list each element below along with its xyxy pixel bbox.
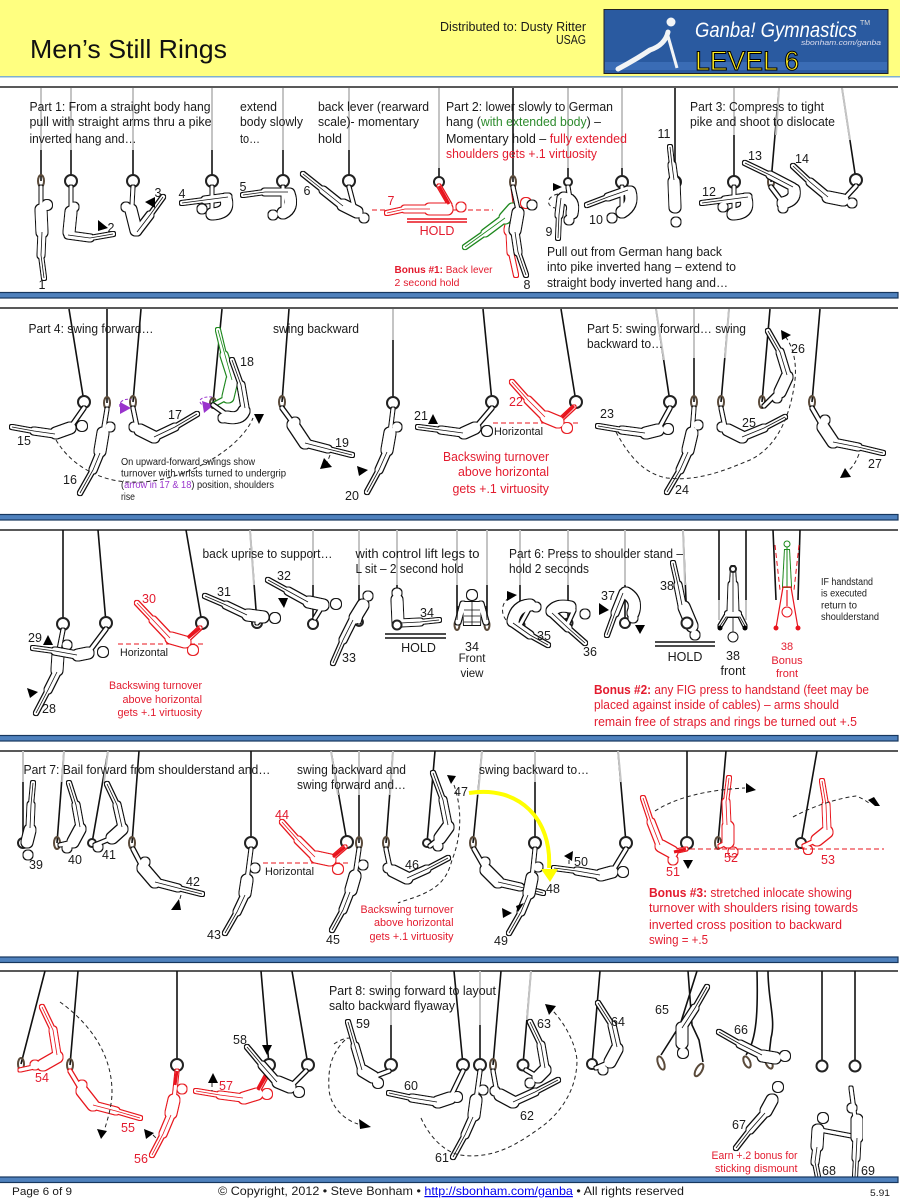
text: back lever: scale)- momentary <box>318 115 420 129</box>
figure 59: 59 <box>356 1017 370 1031</box>
callout: backswing turnover <box>109 680 202 719</box>
figure 62 <box>490 971 558 1123</box>
text: Part 1: Part 1: From a straight body hang <box>30 100 211 114</box>
figure 23: 23 <box>600 407 614 421</box>
figure 54 red <box>18 971 57 1085</box>
text: Part 6 <box>509 547 683 576</box>
figure 60 <box>389 971 469 1102</box>
distribution note: Distributed to: Dusty Ritter <box>440 20 586 34</box>
figure 10: 10 <box>589 213 603 227</box>
callout: sticking dismount bonus: Earn +.2 bonus for <box>712 1150 798 1162</box>
figure 63: 63 <box>537 1017 551 1031</box>
figure 37: 37 <box>601 589 615 603</box>
figure 20: 20 <box>345 489 359 503</box>
figure 13 <box>745 88 794 212</box>
figure 40 <box>54 751 82 867</box>
callout: Bonus 1: Bonus #1: Back lever <box>394 265 493 276</box>
footer: 5.91 <box>870 1188 890 1199</box>
figure 37 <box>599 530 645 635</box>
figure 38 bonus front red and green: 38 <box>781 641 793 653</box>
callout: backswing turnover <box>443 450 550 496</box>
figure 51 red inlocate: 51 <box>666 865 680 879</box>
figure 27 <box>809 309 883 478</box>
figure 49 <box>494 751 542 948</box>
callout: Bonus 3 <box>649 886 858 947</box>
figure 56 red <box>134 971 186 1166</box>
figure 34 side L-sit with hold: HOLD <box>401 641 436 655</box>
figure 68 with ring: 68 <box>822 1164 836 1178</box>
text: extend body: body slowly <box>240 115 304 129</box>
figure 39: 39 <box>29 858 43 872</box>
text: Part 1 <box>30 100 212 146</box>
logo: Ganba Gymnastics Level 6: TM <box>860 20 870 27</box>
label: horizontal: Horizontal <box>265 866 314 878</box>
figure 55 red: 55 <box>121 1121 135 1135</box>
text: Part 4: Part 4: swing forward… <box>28 322 154 336</box>
figure 58: 58 <box>233 1033 247 1047</box>
callout: backswing turnover: gets +.1 virtuosity <box>452 482 550 496</box>
figure 38 side with hold <box>655 530 715 664</box>
figure 56 red: 56 <box>134 1152 148 1166</box>
figure 34 front view: Front <box>459 653 486 665</box>
logo: Ganba Gymnastics Level 6 <box>604 10 888 76</box>
figure 31 <box>205 530 280 628</box>
figure 13: 13 <box>748 149 762 163</box>
note: if handstand: is executed <box>821 588 867 600</box>
figure 59 <box>329 971 397 1129</box>
panel: Part 7 row <box>0 751 898 962</box>
figure 1: 1 <box>39 278 46 292</box>
figure 46: 46 <box>405 858 419 872</box>
callout: backswing turnover: Backswing turnover <box>360 904 454 916</box>
panel: Parts 1 to 3 <box>0 87 898 298</box>
note: if handstand: return to <box>821 600 857 612</box>
figure 8 with red and green overlays: 8 <box>524 278 531 292</box>
figure 52 red: 52 <box>724 851 738 865</box>
figure 45: 45 <box>326 933 340 947</box>
figure 36: 36 <box>583 645 597 659</box>
figure 18 with green overlay: 18 <box>240 355 254 369</box>
figure 16 <box>63 309 114 493</box>
figure 33 <box>333 530 372 665</box>
text: swing backward to: swing backward to… <box>479 763 589 777</box>
figure 22 red turnover <box>493 309 582 433</box>
figure 35: 35 <box>537 629 551 643</box>
figure 38 front: front <box>720 664 746 678</box>
section bar <box>0 957 898 962</box>
figure 20 <box>345 309 402 503</box>
figure 38 front <box>718 530 748 678</box>
figure 31: 31 <box>217 585 231 599</box>
label: horizontal: Horizontal <box>494 426 543 438</box>
text: extend body <box>240 100 304 146</box>
note: upward-forward swings: rise <box>121 492 135 503</box>
figure 27: 27 <box>868 457 882 471</box>
figure 28: 28 <box>42 702 56 716</box>
figure 66 release <box>719 971 790 1070</box>
text: Part 2 <box>446 100 627 161</box>
figure 32: 32 <box>277 569 291 583</box>
callout: backswing turnover: Backswing turnover <box>443 450 549 464</box>
text: swing backward and forward <box>297 763 406 792</box>
callout: backswing turnover: gets +.1 virtuosity <box>118 707 202 719</box>
text: swing backward and forward: swing forward and… <box>297 778 406 792</box>
callout: sticking dismount bonus: sticking dismount <box>715 1163 798 1175</box>
footer: Page 6 of 9 <box>12 1186 72 1198</box>
text: back lever <box>318 100 429 146</box>
logo: Ganba Gymnastics Level 6: Ganba! Gymnastics <box>695 19 857 42</box>
footer: © Copyright, 2012 • Steve Bonham • http://sbonham.com/ganba • All rights reserved <box>218 1184 684 1198</box>
figure 66 release: 66 <box>734 1023 748 1037</box>
figure 15 <box>12 309 90 448</box>
dashed arc with arrow by 55 <box>60 1002 112 1139</box>
panel: Part 6 row <box>0 530 898 741</box>
section bar <box>0 1177 898 1182</box>
figure 63 <box>518 971 551 1088</box>
text: Part 1: inverted hang and… <box>30 132 136 146</box>
callout: Bonus 2: remain free of straps and rings be turned out +.5 <box>594 715 857 729</box>
note: if handstand <box>821 577 879 623</box>
callout: backswing turnover: above horizontal <box>122 694 202 706</box>
callout: Bonus 2: placed against inside of cables) – arms should <box>594 698 839 712</box>
figure 38 bonus front red and green: front <box>776 668 798 680</box>
figure 64 <box>587 971 625 1074</box>
note: upward-forward swings <box>121 457 286 503</box>
figure 65 release: 65 <box>655 1003 669 1017</box>
callout: backswing turnover: gets +.1 virtuosity <box>370 931 454 943</box>
figure 40: 40 <box>68 853 82 867</box>
text: pull out from German hang <box>547 245 736 290</box>
figure 42: 42 <box>186 875 200 889</box>
text: back lever: back lever (rearward <box>318 100 429 114</box>
figure 51 red inlocate <box>643 751 693 879</box>
figure 5: 5 <box>240 180 247 194</box>
figure 12: 12 <box>702 185 716 199</box>
figure 8 with red and green overlays <box>465 88 536 292</box>
figure 53 red: 53 <box>821 853 835 867</box>
callout: Bonus 2 <box>594 683 869 729</box>
figure 26: 26 <box>791 342 805 356</box>
figure 34 front view: view <box>460 668 484 680</box>
figure 4 <box>179 88 228 214</box>
callout: backswing turnover: Backswing turnover <box>109 680 202 692</box>
figure 30 red turnover: 30 <box>142 592 156 606</box>
figure 38 bonus front red and green <box>771 530 803 680</box>
figure 28 <box>27 530 72 716</box>
text: Part 8: Part 8: swing forward to layout <box>329 984 497 998</box>
text: pull out from German hang: into pike inverted hang – extend to <box>547 260 736 274</box>
note: upward-forward swings: On upward-forward swings show <box>121 457 256 468</box>
note: if handstand: shoulderstand <box>821 612 879 623</box>
text: Part 2: Momentary hold – fully extended <box>446 132 627 146</box>
text: Part 6: Part 6: Press to shoulder stand – <box>509 547 683 561</box>
text: with control <box>354 547 480 576</box>
figure 45 <box>326 751 368 947</box>
figure 3: 3 <box>155 186 162 200</box>
distribution note <box>440 20 586 47</box>
figure 43: 43 <box>207 928 221 942</box>
figure 47 <box>398 751 468 903</box>
logo: Ganba Gymnastics Level 6: sbonham.com/ganba <box>801 38 881 47</box>
figure 57 red: 57 <box>219 1079 233 1093</box>
figure 35 <box>503 530 551 645</box>
figure 24 <box>667 309 702 497</box>
figure 55 red <box>67 971 140 1135</box>
text: Part 5: Part 5: swing forward… swing <box>587 322 746 336</box>
callout: Bonus 3: Bonus #3: stretched inlocate showing <box>649 886 852 900</box>
figure 21 <box>414 309 498 436</box>
note: if handstand: IF handstand <box>821 577 873 588</box>
figure 2: 2 <box>108 221 115 235</box>
figure 4: 4 <box>179 187 186 201</box>
figure 41: 41 <box>102 848 116 862</box>
figure 67 dismount <box>732 1082 783 1148</box>
figure 49: 49 <box>494 934 508 948</box>
text: Part 8: salto backward flyaway <box>329 999 456 1013</box>
figure 44 red turnover <box>263 751 353 874</box>
callout: Bonus 3: turnover with shoulders rising towards <box>649 901 858 915</box>
text: Part 1: pull with straight arms thru a pike <box>30 115 212 129</box>
figure 25 <box>718 309 785 437</box>
title: Men’s Still Rings <box>30 34 227 64</box>
red horizontal reference line <box>690 848 884 850</box>
figure 47: 47 <box>454 785 468 799</box>
figure 69 with ring: 69 <box>861 1164 875 1178</box>
figure 42 <box>129 751 202 910</box>
dashed swing arrow over 51 and 52 <box>655 783 756 811</box>
figure 24: 24 <box>675 483 689 497</box>
figure 43 <box>207 751 260 942</box>
figure 34 front view: 34 <box>465 640 479 654</box>
text: Part 2: Part 2: lower slowly to German <box>446 100 613 114</box>
text: with control: with control lift legs to <box>354 547 480 561</box>
figure 29: 29 <box>28 631 42 645</box>
figure 34 side L-sit with hold <box>385 530 446 655</box>
figure 62: 62 <box>520 1109 534 1123</box>
panel: Part 8 row <box>0 971 898 1182</box>
text: Part 2: shoulders gets +.1 virtuosity <box>446 147 598 161</box>
text: Part 6: hold 2 seconds <box>509 562 589 576</box>
text: Part 3 <box>690 100 835 129</box>
figure 69 with ring <box>848 971 875 1178</box>
figure 29 <box>28 530 112 657</box>
figure 32 <box>268 530 341 629</box>
text: swing backward: swing backward <box>273 322 359 336</box>
figure 16: 16 <box>63 473 77 487</box>
figure 57 red <box>196 971 275 1099</box>
text: Part 3: Part 3: Compress to tight <box>690 100 824 114</box>
callout: Bonus 1 <box>394 265 493 289</box>
figure 9: 9 <box>546 225 553 239</box>
header banner <box>0 0 900 78</box>
text: pull out from German hang: Pull out from German hang back <box>547 245 723 259</box>
figure 11 <box>658 88 681 226</box>
footer <box>12 1184 890 1199</box>
callout: backswing turnover <box>360 904 454 943</box>
text: with control: L sit – 2 second hold <box>356 562 464 576</box>
callout: Bonus 3: swing = +.5 <box>649 933 708 947</box>
figure 21: 21 <box>414 409 428 423</box>
figure 7 red back lever with hold <box>372 88 493 238</box>
section bar <box>0 736 898 741</box>
figure 7 red back lever with hold: 7 <box>388 194 395 208</box>
figure 60: 60 <box>404 1079 418 1093</box>
text: pull out from German hang: straight body inverted hang and… <box>547 276 728 290</box>
figure 39 <box>18 751 43 872</box>
note: upward-forward swings: turnover with wrists turned to undergrip <box>121 468 286 480</box>
swing arc 23 to 26 with arrow <box>616 330 795 479</box>
figure 33: 33 <box>342 651 356 665</box>
figure 6: 6 <box>304 184 311 198</box>
yellow arrow from 47 to 48 <box>469 792 558 882</box>
figure 34 front view <box>454 530 490 680</box>
callout: Bonus 1: 2 second hold <box>394 278 460 289</box>
section bar <box>0 292 898 298</box>
figure 2 <box>65 88 115 238</box>
figure 64: 64 <box>611 1015 625 1029</box>
figure 25: 25 <box>742 416 756 430</box>
figure 19 <box>279 309 352 469</box>
figure 30 red turnover <box>118 530 208 655</box>
figure 61 <box>435 971 488 1165</box>
callout: sticking dismount bonus <box>712 1150 798 1175</box>
text: swing backward and forward: swing backward and <box>297 763 406 777</box>
section bar <box>0 514 898 520</box>
figure 67 dismount: 67 <box>732 1118 746 1132</box>
text: back uprise: back uprise to support… <box>202 547 332 561</box>
figure 14: 14 <box>795 152 809 166</box>
dashed salto arc with arrow <box>421 1004 577 1156</box>
figure 48: 48 <box>546 882 560 896</box>
text: Part 5: backward to… <box>587 337 663 351</box>
figure 7 red back lever with hold: HOLD <box>420 224 454 238</box>
figure 46 <box>383 751 448 878</box>
figure 36 <box>552 530 597 659</box>
note: upward-forward swings: (arrow in 17 & 18) position, shoulders <box>121 480 274 491</box>
figure 58 <box>233 971 314 1097</box>
text: extend body: extend <box>240 100 277 114</box>
figure 18 with green overlay <box>200 309 264 424</box>
figure 17: 17 <box>168 408 182 422</box>
text: extend body: to… <box>240 132 260 146</box>
panel: Parts 4 and 5 <box>0 308 898 520</box>
callout: Bonus 3: inverted cross position to backward <box>649 918 842 932</box>
figure 65 release <box>655 971 707 1078</box>
swing arc under figures 15 to 18 <box>56 418 253 482</box>
figure 54 red: 54 <box>35 1071 49 1085</box>
figure 50 <box>554 751 632 877</box>
text: Part 5 <box>587 322 746 351</box>
figure 38 side with hold: 38 <box>660 579 674 593</box>
logo: Ganba Gymnastics Level 6: LEVEL 6 <box>695 46 799 76</box>
label: horizontal: Horizontal <box>120 647 168 659</box>
figure 14 <box>793 88 862 208</box>
figure 12 <box>702 88 748 214</box>
figure 41 <box>88 751 122 862</box>
figure 15: 15 <box>17 434 31 448</box>
figure 38 front: 38 <box>726 649 740 663</box>
text: Part 7: Part 7: Bail forward from shoulderstand and… <box>24 763 270 777</box>
text: Part 8 <box>329 984 497 1013</box>
dashed swing arrow over 53 <box>793 796 880 817</box>
figure 6 <box>303 88 368 222</box>
figure 17 <box>120 309 197 437</box>
figure 52 red <box>715 751 738 865</box>
figure 9 <box>546 88 574 239</box>
callout: Bonus 2: Bonus #2: any FIG press to handstand (feet may be <box>594 683 869 697</box>
text: back lever: hold <box>318 132 342 146</box>
figure 50: 50 <box>574 855 588 869</box>
figure 3 <box>122 88 163 232</box>
figure 22 red turnover: 22 <box>509 395 523 409</box>
figure 34 side L-sit with hold: 34 <box>420 606 434 620</box>
figure 68 with ring <box>815 971 852 1178</box>
callout: backswing turnover: above horizontal <box>458 465 549 479</box>
figure 5 <box>240 88 291 220</box>
figure 61: 61 <box>435 1151 449 1165</box>
figure 38 bonus front red and green: Bonus <box>771 655 803 667</box>
figure 44 red turnover: 44 <box>275 808 289 822</box>
figure 26 <box>759 309 805 408</box>
figure 48 <box>470 751 560 896</box>
figure 23 <box>598 309 676 434</box>
figure 1 <box>38 88 52 292</box>
figure 19: 19 <box>335 436 349 450</box>
figure 38 side with hold: HOLD <box>668 650 702 664</box>
callout: backswing turnover: above horizontal <box>374 917 454 929</box>
text: Part 3: pike and shoot to dislocate <box>690 115 835 129</box>
figure 10 <box>587 88 631 227</box>
figure 11: 11 <box>658 127 671 141</box>
distribution note: USAG <box>556 33 586 47</box>
text: Part 2: hang (with extended body) – <box>446 115 601 129</box>
figure 53 red <box>796 751 835 867</box>
